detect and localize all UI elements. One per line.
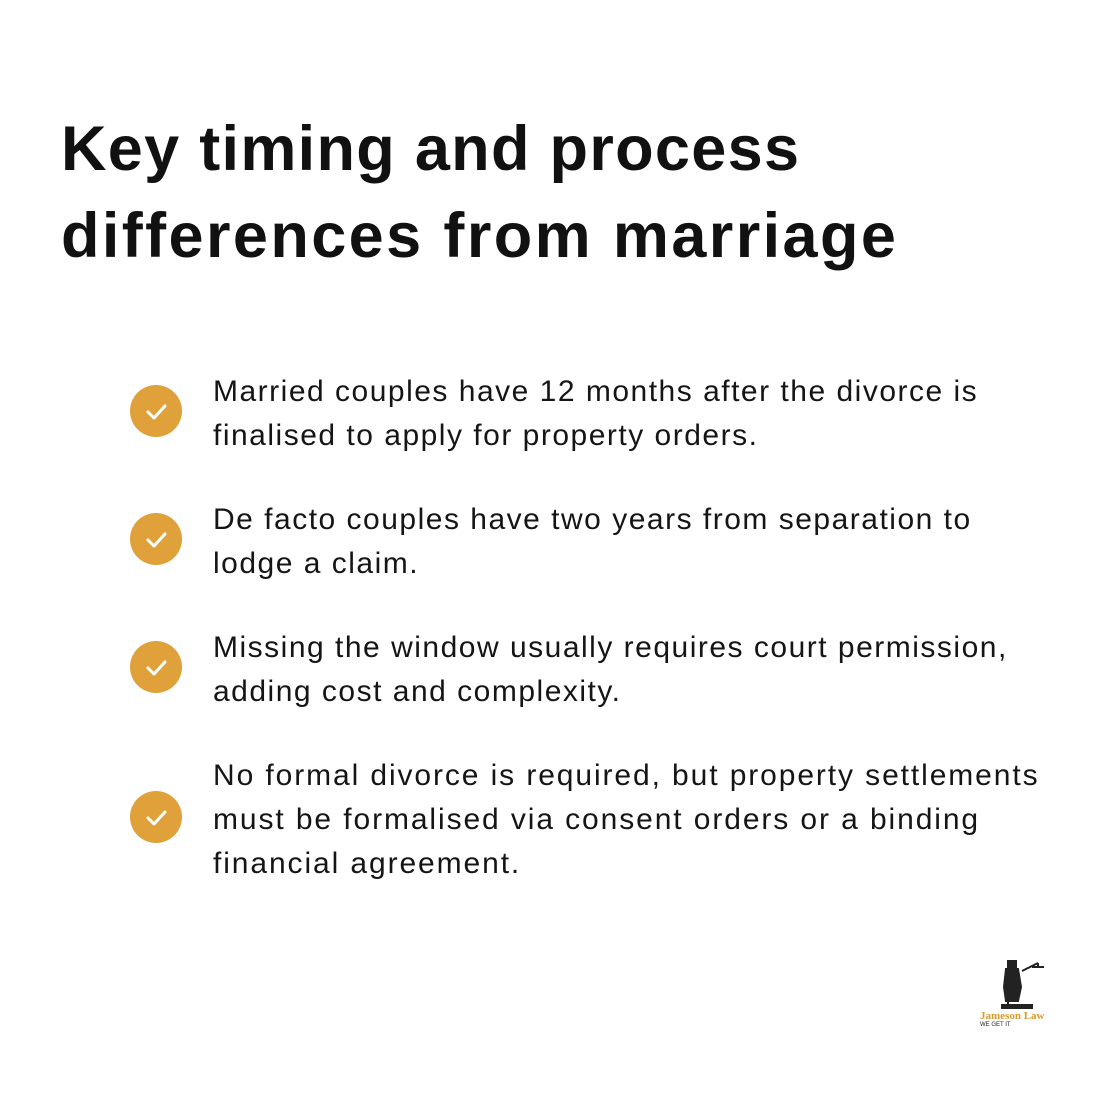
text: financial agreement. [213, 847, 521, 880]
icon: check [130, 385, 182, 437]
icon: check [130, 791, 182, 843]
item 4 [130, 759, 1039, 880]
text: lodge a claim. [213, 547, 419, 580]
title [61, 114, 898, 271]
item 1 [130, 375, 978, 452]
text: finalised to apply for property orders. [213, 419, 758, 452]
brand name: Jameson Law [980, 1010, 1044, 1022]
tagline: WE GET IT [980, 1022, 1011, 1028]
text: adding cost and complexity. [213, 675, 621, 708]
text: must be formalised via consent orders or a binding [213, 803, 980, 836]
item 2 [130, 503, 972, 580]
title: differences from marriage [61, 201, 898, 271]
text [213, 631, 1008, 708]
icon: lady justice [1001, 960, 1044, 1009]
text [213, 375, 978, 452]
logo [980, 960, 1044, 1028]
text [213, 503, 972, 580]
text: No formal divorce is required, but property settlements [213, 759, 1039, 792]
icon: check [130, 513, 182, 565]
text [213, 759, 1039, 880]
text: Married couples have 12 months after the divorce is [213, 375, 978, 408]
icon: check [130, 641, 182, 693]
text: De facto couples have two years from separation to [213, 503, 972, 536]
text: Missing the window usually requires court permission, [213, 631, 1008, 664]
title: Key timing and process [61, 114, 800, 184]
item 3 [130, 631, 1008, 708]
